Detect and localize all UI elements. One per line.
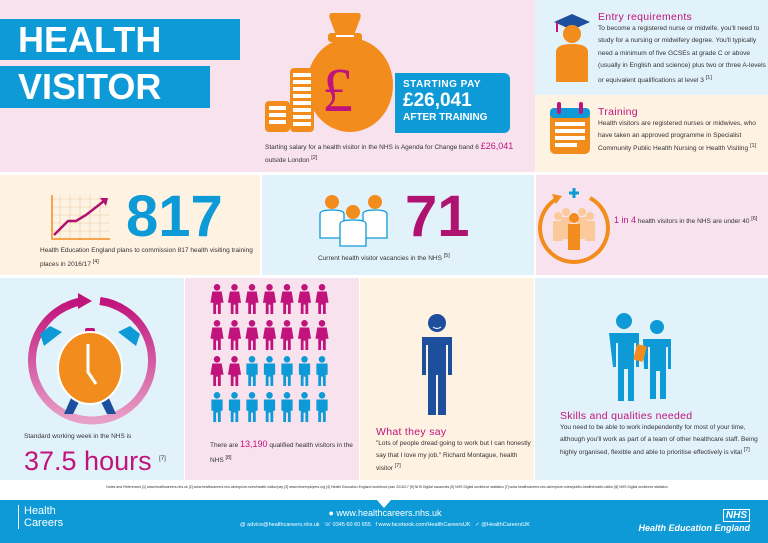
icon: circle of people <box>538 188 610 264</box>
skills and qualities <box>560 410 758 456</box>
arrow notch <box>377 500 391 508</box>
icon: three staff <box>319 195 388 247</box>
title: HEALTH <box>18 19 161 60</box>
icon: growth chart <box>51 195 110 240</box>
icon: two staff <box>609 313 671 401</box>
logo: health careers: Health <box>24 505 56 517</box>
logo: NHS HEE: Health Education England <box>638 523 750 533</box>
icon: alarm clock <box>28 293 156 424</box>
what they say: What they say <box>376 426 446 438</box>
logo: NHS HEE: NHS <box>726 510 747 521</box>
starting pay box: STARTING PAY <box>403 79 481 90</box>
icon: single person <box>422 314 452 415</box>
13,190 text: There are 13,190 qualified health visitors in the NHS [8] <box>210 439 353 464</box>
salary caption: Starting salary for a health visitor in the NHS is Agenda for Change band 6 £26,041 outside London [2] <box>265 141 513 164</box>
starting pay box <box>395 73 510 133</box>
working week text: 37.5 hours [7] <box>24 446 166 476</box>
caption 71: Current health visitor vacancies in the NHS [5] <box>318 253 450 262</box>
stat 817: 817 <box>126 184 223 249</box>
icon: people grid <box>210 284 329 422</box>
contact details: ● www.healthcareers.nhs.uk <box>328 508 442 518</box>
logo: health careers <box>18 505 63 529</box>
caption 817: Health Education England plans to commission 817 health visiting training places in 2016/17 [4] <box>40 247 253 268</box>
contact details <box>240 508 530 528</box>
icon: money bag and coins: £ <box>322 57 353 125</box>
references: Notes and References [1] www.healthcareers.nhs.uk [2] www.healthcareers.nhs.uk/explore-roles/health-visitor/pay [3] www.nhsemployers.org [4] Health Education England workforce plan 2016/17 [5] NHS Digital vacancies [6] NHS Digital workforce statistics [7] www.healthcareers.nhs.uk/explore-roles/public-health/health-visitor [8] NHS Digital workforce statistics <box>106 485 668 489</box>
what they say <box>376 426 531 472</box>
footer <box>0 500 768 543</box>
logo: NHS HEE <box>638 509 750 533</box>
1 in 4 text: 1 in 4 health visitors in the NHS are under 40 [6] <box>614 215 757 225</box>
icon: money bag and coins <box>265 13 393 132</box>
contact details: @ advice@healthcareers.nhs.uk ☏ 0345 60 60 655 f www.facebook.com/HealthCareersUK ✓ @HealthCareersUK <box>240 522 530 528</box>
training: Training <box>598 106 638 118</box>
working week text: Standard working week in the NHS is <box>24 433 131 440</box>
title <box>0 19 240 108</box>
training <box>598 106 756 152</box>
stat 71: 71 <box>405 184 470 249</box>
title: VISITOR <box>18 66 161 107</box>
logo: health careers: Careers <box>24 517 63 529</box>
starting pay box: AFTER TRAINING <box>403 112 487 123</box>
skills and qualities: You need to be able to work independently for most of your time, although you'll work as part of a team of other healthcare staff. Being highly organised, flexible and able to prioritise effectively is vital [7] <box>560 424 758 456</box>
entry requirements: Entry requirements <box>598 11 692 23</box>
starting pay box: £26,041 <box>403 90 472 111</box>
icon: graduate <box>554 14 590 82</box>
entry requirements: To become a registered nurse or midwife, you'll need to study for a nursing or midwifery degree. You'll typically need a minimum of five GCSEs at grade C or above (usually in English and science) plus two or three A-levels or equivalent qualifications at level 3 [1] <box>598 25 766 84</box>
what they say: "Lots of people dread going to work but I can honestly say that I love my job." Richard Montague, health visitor [7] <box>376 440 531 472</box>
skills and qualities: Skills and qualities needed <box>560 410 692 422</box>
training: Health visitors are registered nurses or midwives, who have taken an approved programme in Specialist Community Public Health Nursing or Health Visiting [1] <box>598 120 756 152</box>
icon: calendar <box>550 102 590 154</box>
